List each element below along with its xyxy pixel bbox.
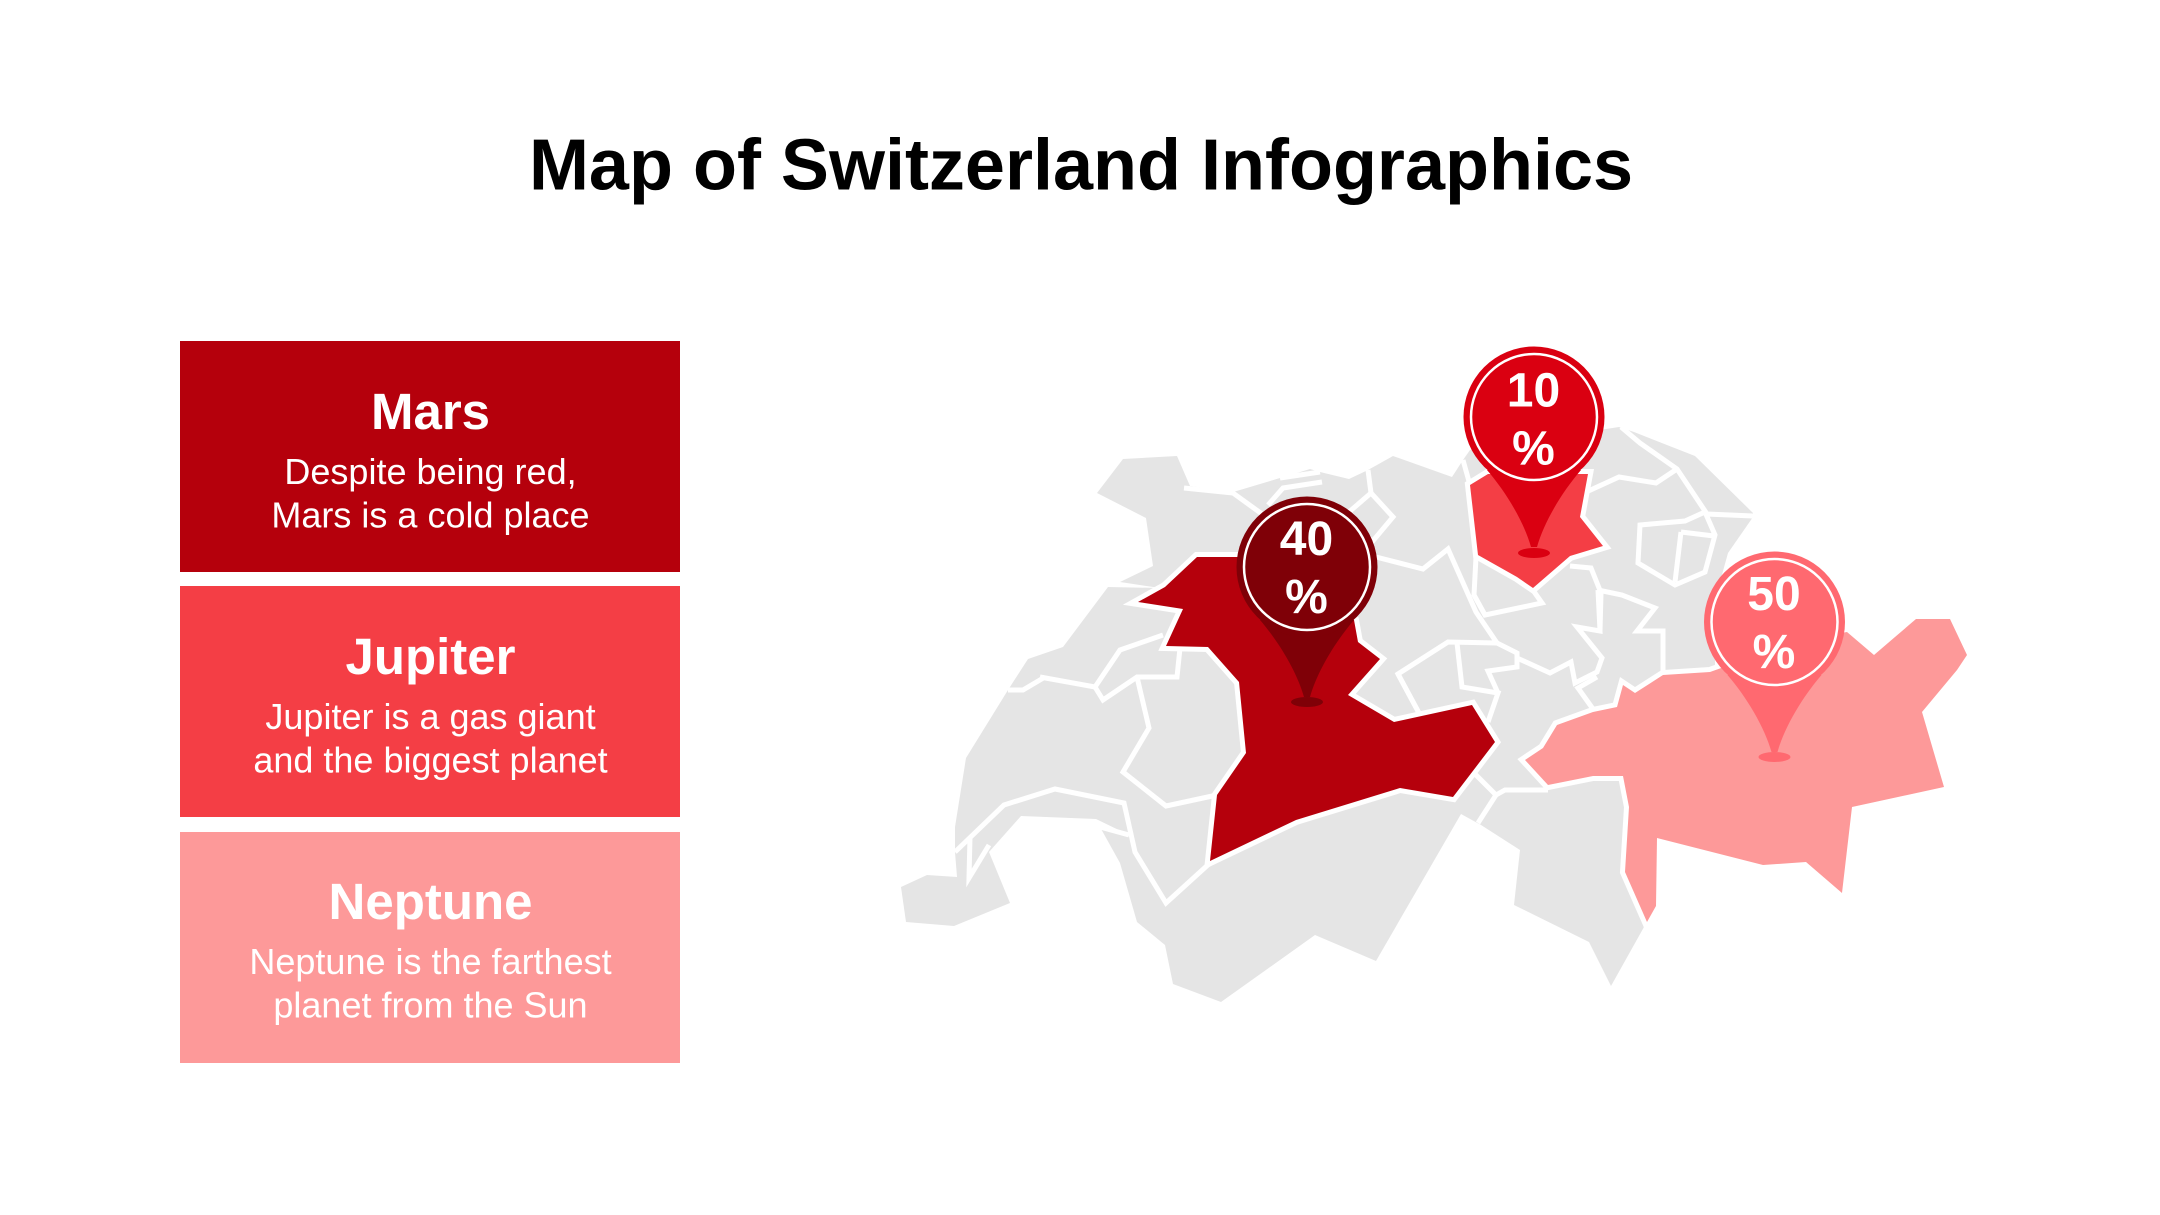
pin: 10 percent: 10: [1507, 364, 1560, 418]
region: Mars canton: [1138, 557, 1495, 861]
panel: Neptune: planet from the Sun: [273, 984, 588, 1026]
title: Map of Switzerland Infographics: [529, 126, 1633, 206]
panel: Mars: Mars: [371, 383, 490, 440]
pin: 10 percent: %: [1512, 422, 1555, 476]
panel: Jupiter: Jupiter is a gas giant: [265, 696, 596, 737]
panel: Jupiter: and the biggest planet: [253, 740, 608, 780]
map of Switzerland: [901, 427, 1967, 1002]
pin: 40 percent: 40: [1280, 513, 1333, 566]
map base: grey cantons: [901, 427, 1753, 1002]
panel: Mars: [180, 341, 680, 572]
panel: Neptune: Neptune: [328, 873, 532, 930]
panel: Mars: Mars is a cold place: [271, 494, 590, 536]
panel: Jupiter: Jupiter: [345, 628, 516, 685]
pin: 40 percent: [1236, 496, 1378, 707]
panel: Jupiter: [180, 586, 680, 817]
pin: 10 percent: [1464, 346, 1604, 558]
pin: 50 percent: %: [1753, 626, 1795, 679]
panel: Neptune: Neptune is the farthest: [249, 941, 612, 982]
pin: 50 percent: [1704, 552, 1845, 762]
panel: Mars: Despite being red,: [284, 451, 577, 492]
region: Neptune canton: [1525, 619, 1967, 922]
pin: 50 percent: 50: [1747, 568, 1801, 621]
pin: 40 percent: %: [1285, 571, 1328, 624]
region: Jupiter canton: [1470, 474, 1603, 588]
panel: Neptune: [180, 832, 680, 1063]
